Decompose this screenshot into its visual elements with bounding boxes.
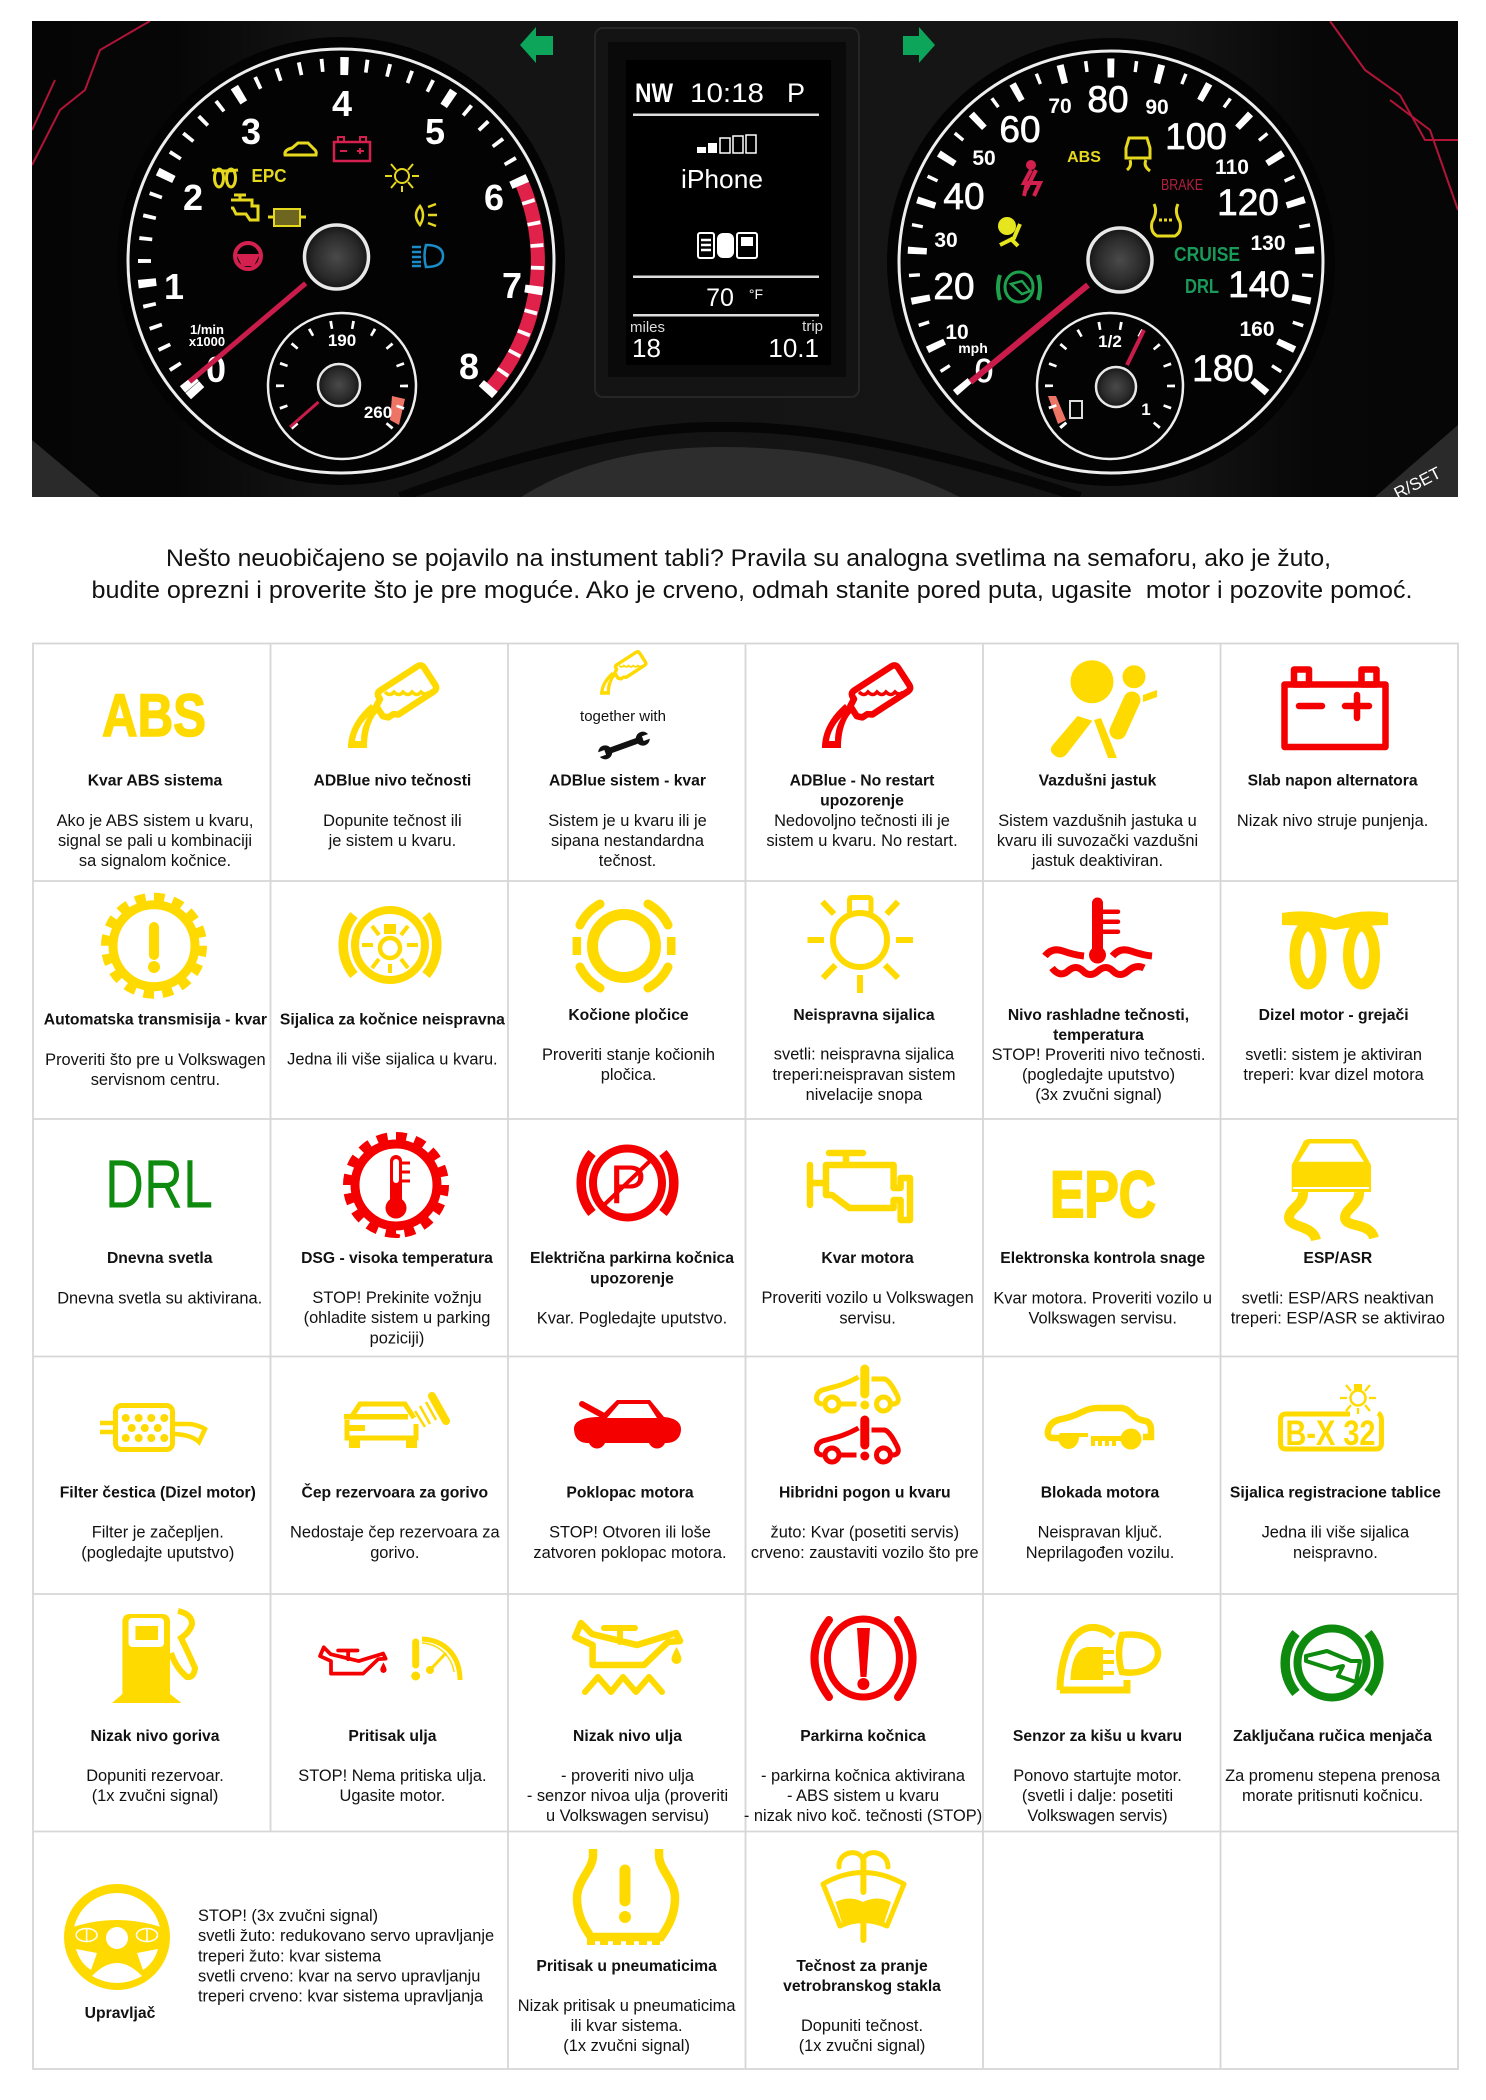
heading: engine fault: Kvar motora <box>821 1250 914 1267</box>
panel: low fuel <box>86 1611 224 1805</box>
right speedometer gauge: 1/2 <box>1098 332 1122 351</box>
description: ADBlue level: Dopunite tečnost ili <box>323 812 462 830</box>
description: brake bulb: Jedna ili više sijalica u kvaru. <box>287 1050 498 1068</box>
panel: ADBlue no restart <box>766 664 958 850</box>
description: ADBlue system: tečnost. <box>599 852 656 870</box>
heading: DSG temperature: DSG - visoka temperatura <box>301 1250 493 1267</box>
panel: ADBlue level <box>314 664 471 850</box>
icon: wrench <box>594 729 654 762</box>
description: ADBlue no restart: sistem u kvaru. No restart. <box>766 832 958 850</box>
panel: steering <box>68 1888 494 2022</box>
description: DSG temperature: STOP! Prekinite vožnju <box>312 1289 482 1307</box>
heading: brake pads: Kočione pločice <box>568 1007 689 1024</box>
panel: ESP/ASR <box>1231 1139 1445 1328</box>
panel: immobiliser <box>1026 1408 1174 1562</box>
right speedometer gauge: CRUISE <box>1174 244 1240 266</box>
icon: car with key <box>1048 1408 1151 1450</box>
arrow: left turn signal <box>520 27 553 63</box>
heading: ADBlue no restart: upozorenje <box>820 792 904 810</box>
description: steering: svetli crveno: kvar na servo upravljanju <box>198 1968 480 1986</box>
heading: shift lock: Zaključana ručica menjača <box>1233 1728 1432 1745</box>
left tachometer gauge: 6 <box>484 177 504 218</box>
right speedometer gauge: 20 <box>933 266 975 307</box>
icon: coolant thermometer <box>1045 903 1152 974</box>
description: ESP/ASR: svetli: ESP/ARS neaktivan <box>1242 1290 1434 1308</box>
description: bulb fault: nivelacije snopa <box>806 1086 923 1104</box>
icon: engine <box>810 1153 910 1220</box>
description: shift lock: Za promenu stepena prenosa <box>1225 1767 1440 1785</box>
description: tyre pressure: (1x zvučni signal) <box>563 2037 690 2055</box>
panel: washer fluid <box>783 1853 941 2055</box>
heading: electric parking brake: Električna parkirna kočnica <box>530 1250 734 1267</box>
icon: open bonnet car <box>574 1400 681 1448</box>
description: coolant: STOP! Proveriti nivo tečnosti. <box>992 1046 1205 1064</box>
heading: particulate filter: Filter čestica (Dizel motor) <box>60 1484 256 1502</box>
panel: ADBlue system fault <box>548 651 707 870</box>
icon: ADBlue bottle yellow <box>348 664 438 748</box>
left tachometer gauge: 1/min <box>190 322 224 337</box>
heading: tyre pressure: Pritisak u pneumaticima <box>536 1958 717 1975</box>
description: ABS: signal se pali u kombinaciji <box>58 832 252 850</box>
description: alternator: Nizak nivo struje punjenja. <box>1237 812 1428 830</box>
icon: skidding car <box>1289 1139 1374 1240</box>
heading: low fuel: Nizak nivo goriva <box>90 1728 220 1745</box>
icon: gear thermometer <box>348 1136 444 1234</box>
panel: airbag <box>997 660 1198 870</box>
icon: hybrid car red <box>816 1420 898 1462</box>
intro text: budite oprezni i proverite što je pre moguće. Ako je crveno, odmah stanite pored puta, ugasite motor i pozovite pomoć. <box>92 577 1412 604</box>
heading: licence plate lamp: Sijalica registracione tablice <box>1230 1484 1441 1502</box>
left tachometer gauge: 5 <box>425 111 445 152</box>
icon: rain light sensor <box>1060 1627 1158 1690</box>
heading: ABS: Kvar ABS sistema <box>88 772 223 790</box>
description: low oil: - senzor nivoa ulja (proveriti <box>527 1787 728 1805</box>
right speedometer gauge: 40 <box>943 176 985 217</box>
heading: automatic transmission: Automatska transmisija - kvar <box>44 1012 267 1028</box>
description: coolant: (pogledajte uputstvo) <box>1022 1066 1175 1084</box>
description: DSG temperature: (ohladite sistem u parking <box>304 1309 490 1327</box>
icon: parking brake crossed <box>581 1148 674 1218</box>
icon: pressure gauge warning <box>411 1639 460 1680</box>
right speedometer gauge: 120 <box>1217 182 1279 223</box>
description: tyre pressure: ili kvar sistema. <box>571 2017 683 2035</box>
centre display: trip <box>802 318 823 335</box>
dashboard photo <box>32 21 1458 497</box>
icon: EPC: EPC <box>1050 1157 1156 1231</box>
panel: alternator <box>1237 670 1428 830</box>
centre display: P <box>787 78 805 108</box>
centre display: 18 <box>632 333 661 363</box>
description: engine fault: servisu. <box>839 1310 896 1328</box>
heading: oil pressure: Pritisak ulja <box>348 1728 437 1745</box>
description: tyre pressure: Nizak pritisak u pneumaticima <box>518 1997 735 2015</box>
centre display: miles <box>630 319 665 336</box>
icon: car with fuel cap <box>344 1396 446 1448</box>
heading: brake bulb: Sijalica za kočnice neispravna <box>280 1012 505 1028</box>
description: oil pressure: Ugasite motor. <box>340 1787 445 1805</box>
description: coolant: (3x zvučni signal) <box>1035 1086 1162 1104</box>
icon: DRL: DRL <box>105 1146 213 1222</box>
right speedometer gauge: DRL <box>1185 276 1219 298</box>
centre display: 10.1 <box>768 333 819 363</box>
description: parking brake: - nizak nivo koč. tečnosti (STOP) <box>744 1807 982 1825</box>
right speedometer gauge: 50 <box>972 147 996 170</box>
left tachometer gauge: 0 <box>206 349 226 390</box>
icon: battery <box>1284 670 1386 747</box>
icon: oil can and level <box>575 1623 682 1692</box>
right speedometer gauge: mph <box>958 340 988 356</box>
heading: low oil: Nizak nivo ulja <box>573 1728 682 1745</box>
panel: electric parking brake <box>530 1148 734 1328</box>
right speedometer gauge: 100 <box>1165 116 1227 157</box>
panel: fuel cap <box>290 1396 500 1562</box>
description: steering: svetli žuto: redukovano servo upravljanje <box>198 1927 494 1945</box>
description: particulate filter: Filter je začepljen. <box>92 1524 224 1542</box>
icon: licence plate with bulb: B-X 32 <box>1286 1414 1376 1453</box>
heading: fuel cap: Čep rezervoara za gorivo <box>302 1482 488 1502</box>
intro text <box>92 545 1412 604</box>
left tachometer gauge: 260 <box>364 403 392 422</box>
description: low fuel: (1x zvučni signal) <box>92 1787 218 1805</box>
icon: airbag <box>1051 660 1157 758</box>
heading: ADBlue system: ADBlue sistem - kvar <box>549 772 706 790</box>
description: diesel glow plugs: svetli: sistem je aktiviran <box>1245 1046 1422 1064</box>
heading: DRL: Dnevna svetla <box>107 1250 213 1267</box>
panel: bulb fault <box>772 898 956 1104</box>
description: rain sensor: (svetli i dalje: posetiti <box>1022 1787 1173 1805</box>
panel: licence plate lamp <box>1230 1384 1441 1562</box>
heading: EPC: Elektronska kontrola snage <box>1000 1250 1205 1267</box>
heading: ADBlue no restart: ADBlue - No restart <box>790 772 934 790</box>
description: rain sensor: Volkswagen servis) <box>1027 1807 1168 1825</box>
left tachometer gauge: 190 <box>328 331 356 350</box>
left tachometer gauge: 4 <box>332 83 352 124</box>
dashboard photo: R/SET <box>1391 463 1444 503</box>
heading: electric parking brake: upozorenje <box>590 1270 674 1288</box>
intro text: Nešto neuobičajeno se pojavilo na instument tabli? Pravila su analogna svetlima na semaforu, ako je žuto, <box>166 545 1331 572</box>
description: steering: STOP! (3x zvučni signal) <box>198 1907 378 1925</box>
description: fuel cap: Nedostaje čep rezervoara za <box>290 1524 500 1542</box>
description: automatic transmission: Proveriti što pre u Volkswagen <box>45 1051 266 1069</box>
icon: steering wheel <box>68 1888 166 1986</box>
icon: fuel pump <box>112 1611 195 1703</box>
right speedometer gauge: 90 <box>1145 96 1169 119</box>
description: rain sensor: Ponovo startujte motor. <box>1013 1767 1182 1785</box>
description: ADBlue system: Sistem je u kvaru ili je <box>548 812 707 830</box>
description: ADBlue system: sipana nestandardna <box>551 832 705 850</box>
description: ABS: sa signalom kočnice. <box>79 852 231 870</box>
panel: tyre pressure <box>518 1849 736 2055</box>
right speedometer gauge <box>887 38 1324 486</box>
description: automatic transmission: servisnom centru. <box>91 1071 220 1089</box>
icon: hybrid car yellow <box>816 1369 898 1411</box>
heading: hybrid: Hibridni pogon u kvaru <box>779 1484 951 1502</box>
icon: licence plate with bulb <box>1280 1384 1382 1453</box>
panel: rain sensor <box>1013 1627 1182 1825</box>
right speedometer gauge: 1 <box>1141 400 1151 419</box>
panel: diesel glow plugs <box>1243 911 1425 1084</box>
description: fuel cap: gorivo. <box>370 1544 419 1562</box>
centre display: 70 <box>706 284 734 312</box>
icon: brake pads <box>573 904 676 988</box>
description: engine fault: Proveriti vozilo u Volkswagen <box>761 1289 974 1307</box>
centre display: iPhone <box>681 164 763 194</box>
left tachometer gauge <box>126 37 565 485</box>
description: shift lock: morate pritisnuti kočnicu. <box>1242 1787 1423 1805</box>
right speedometer gauge: 0 <box>975 352 993 389</box>
right speedometer gauge: 70 <box>1048 95 1072 118</box>
right speedometer gauge: BRAKE <box>1161 177 1203 194</box>
description: EPC: Volkswagen servisu. <box>1028 1310 1177 1328</box>
right speedometer gauge: 160 <box>1239 318 1275 341</box>
description: airbag: Sistem vazdušnih jastuka u <box>998 812 1197 830</box>
panel: low oil <box>527 1623 728 1825</box>
panel: DRL <box>57 1146 262 1308</box>
panel: brake pads <box>542 904 715 1084</box>
heading: diesel glow plugs: Dizel motor - grejači <box>1259 1007 1409 1024</box>
label: together with: together with <box>580 708 666 725</box>
panel: particulate filter <box>60 1406 256 1562</box>
heading: alternator: Slab napon alternatora <box>1248 772 1418 790</box>
description: ADBlue no restart: Nedovoljno tečnosti ili je <box>774 812 950 830</box>
description: hybrid: žuto: Kvar (posetiti servis) <box>771 1524 959 1542</box>
left tachometer gauge: EPC <box>252 166 286 186</box>
icon: brake bulb <box>343 910 437 980</box>
left tachometer gauge: 3 <box>241 111 261 152</box>
description: bulb fault: svetli: neispravna sijalica <box>774 1046 954 1064</box>
panel: EPC <box>993 1157 1212 1328</box>
description: diesel glow plugs: treperi: kvar dizel motora <box>1243 1066 1425 1084</box>
heading: washer fluid: Tečnost za pranje <box>796 1958 928 1975</box>
icon: ADBlue bottle red <box>822 664 912 748</box>
centre display: NW <box>635 78 673 108</box>
right speedometer gauge: ABS <box>1067 149 1101 166</box>
arrow: right turn signal <box>903 27 935 63</box>
left tachometer gauge: 1 <box>164 266 184 307</box>
description: parking brake: - parkirna kočnica aktivirana <box>761 1767 965 1785</box>
heading: ADBlue level: ADBlue nivo tečnosti <box>314 772 471 790</box>
description: low oil: - proveriti nivo ulja <box>561 1767 694 1785</box>
panel: DSG temperature <box>301 1136 493 1348</box>
icon: diesel filter <box>100 1406 205 1450</box>
panel: engine fault <box>761 1153 974 1328</box>
panel: coolant <box>992 903 1205 1104</box>
description: brake pads: Proveriti stanje kočionih <box>542 1046 715 1064</box>
icon: parking brake crossed: P <box>610 1153 646 1215</box>
description: electric parking brake: Kvar. Pogledajte uputstvo. <box>537 1310 727 1328</box>
description: immobiliser: Neprilagođen vozilu. <box>1026 1544 1174 1562</box>
description: EPC: Kvar motora. Proveriti vozilo u <box>993 1290 1212 1308</box>
icon: parking brake warning <box>814 1619 912 1697</box>
centre display: 10:18 <box>690 78 764 108</box>
right speedometer gauge: 30 <box>934 229 958 252</box>
description: bulb fault: treperi:neispravan sistem <box>772 1066 956 1084</box>
panel: oil pressure <box>298 1639 487 1805</box>
icon: glow plug <box>1282 911 1388 984</box>
description: low fuel: Dopuniti rezervoar. <box>86 1767 224 1785</box>
icon: tyre pressure <box>577 1849 675 1941</box>
right speedometer gauge: 140 <box>1228 264 1290 305</box>
icon: light bulb <box>808 898 913 993</box>
heading: bonnet: Poklopac motora <box>566 1484 694 1502</box>
icon: windscreen washer <box>823 1853 904 1940</box>
description: airbag: jastuk deaktiviran. <box>1031 852 1163 870</box>
description: low oil: u Volkswagen servisu) <box>546 1807 709 1825</box>
description: bonnet: STOP! Otvoren ili loše <box>549 1524 711 1542</box>
description: oil pressure: STOP! Nema pritiska ulja. <box>298 1767 487 1785</box>
heading: coolant: Nivo rashladne tečnosti, <box>1008 1007 1189 1024</box>
right speedometer gauge: 110 <box>1215 156 1249 179</box>
panel: automatic transmission <box>44 897 267 1089</box>
right speedometer gauge: 10 <box>945 321 969 344</box>
description: hybrid: crveno: zaustaviti vozilo što pre <box>751 1544 979 1562</box>
warning-light table grid <box>33 644 1458 2069</box>
heading: immobiliser: Blokada motora <box>1041 1484 1160 1502</box>
description: airbag: kvaru ili suvozački vazdušni <box>997 832 1198 850</box>
description: licence plate lamp: neispravno. <box>1293 1544 1378 1562</box>
description: washer fluid: Dopuniti tečnost. <box>801 2017 923 2035</box>
panel: ABS <box>57 682 253 870</box>
description: washer fluid: (1x zvučni signal) <box>799 2037 925 2055</box>
panel: hybrid <box>751 1369 979 1562</box>
left tachometer gauge: 2 <box>183 177 203 218</box>
description: brake pads: pločica. <box>601 1066 656 1084</box>
heading: rain sensor: Senzor za kišu u kvaru <box>1013 1728 1182 1745</box>
icon: small ADBlue bottle <box>600 651 647 695</box>
description: particulate filter: (pogledajte uputstvo) <box>81 1544 234 1562</box>
heading: coolant: temperatura <box>1053 1027 1144 1044</box>
icon: ABS: ABS <box>102 682 206 749</box>
description: steering: treperi crveno: kvar sistema upravljanja <box>198 1988 484 2006</box>
centre display <box>595 28 859 397</box>
panel: parking brake <box>744 1619 982 1825</box>
heading: steering: Upravljač <box>85 2005 156 2022</box>
description: licence plate lamp: Jedna ili više sijalica <box>1262 1524 1409 1542</box>
description: DRL: Dnevna svetla su aktivirana. <box>57 1290 262 1308</box>
heading: ESP/ASR: ESP/ASR <box>1303 1250 1372 1267</box>
icon: oil can red <box>320 1647 387 1674</box>
right speedometer gauge: 60 <box>999 109 1041 150</box>
description: immobiliser: Neispravan ključ. <box>1038 1524 1162 1542</box>
left tachometer gauge: 8 <box>459 346 479 387</box>
panel: brake bulb <box>280 910 505 1068</box>
description: ESP/ASR: treperi: ESP/ASR se aktivirao <box>1231 1310 1445 1328</box>
panel: shift lock <box>1225 1628 1441 1805</box>
right speedometer gauge: 80 <box>1087 79 1129 120</box>
description: steering: treperi žuto: kvar sistema <box>198 1948 382 1966</box>
description: ADBlue level: je sistem u kvaru. <box>328 832 456 850</box>
heading: washer fluid: vetrobranskog stakla <box>783 1978 941 1995</box>
right speedometer gauge: 180 <box>1192 348 1254 389</box>
description: bonnet: zatvoren poklopac motora. <box>533 1544 727 1562</box>
right speedometer gauge: 130 <box>1250 232 1286 255</box>
left tachometer gauge: 7 <box>502 265 522 306</box>
panel: bonnet <box>533 1400 727 1562</box>
description: DSG temperature: poziciji) <box>370 1330 424 1348</box>
description: ABS: Ako je ABS sistem u kvaru, <box>57 812 253 830</box>
heading: parking brake: Parkirna kočnica <box>800 1728 926 1745</box>
left tachometer gauge: x1000 <box>189 334 225 349</box>
heading: bulb fault: Neispravna sijalica <box>793 1007 935 1024</box>
icon: gear warning <box>106 897 202 994</box>
heading: airbag: Vazdušni jastuk <box>1039 772 1157 790</box>
centre display: °F <box>749 286 763 302</box>
description: parking brake: - ABS sistem u kvaru <box>787 1787 939 1805</box>
icon: shift lock brake <box>1285 1628 1379 1698</box>
